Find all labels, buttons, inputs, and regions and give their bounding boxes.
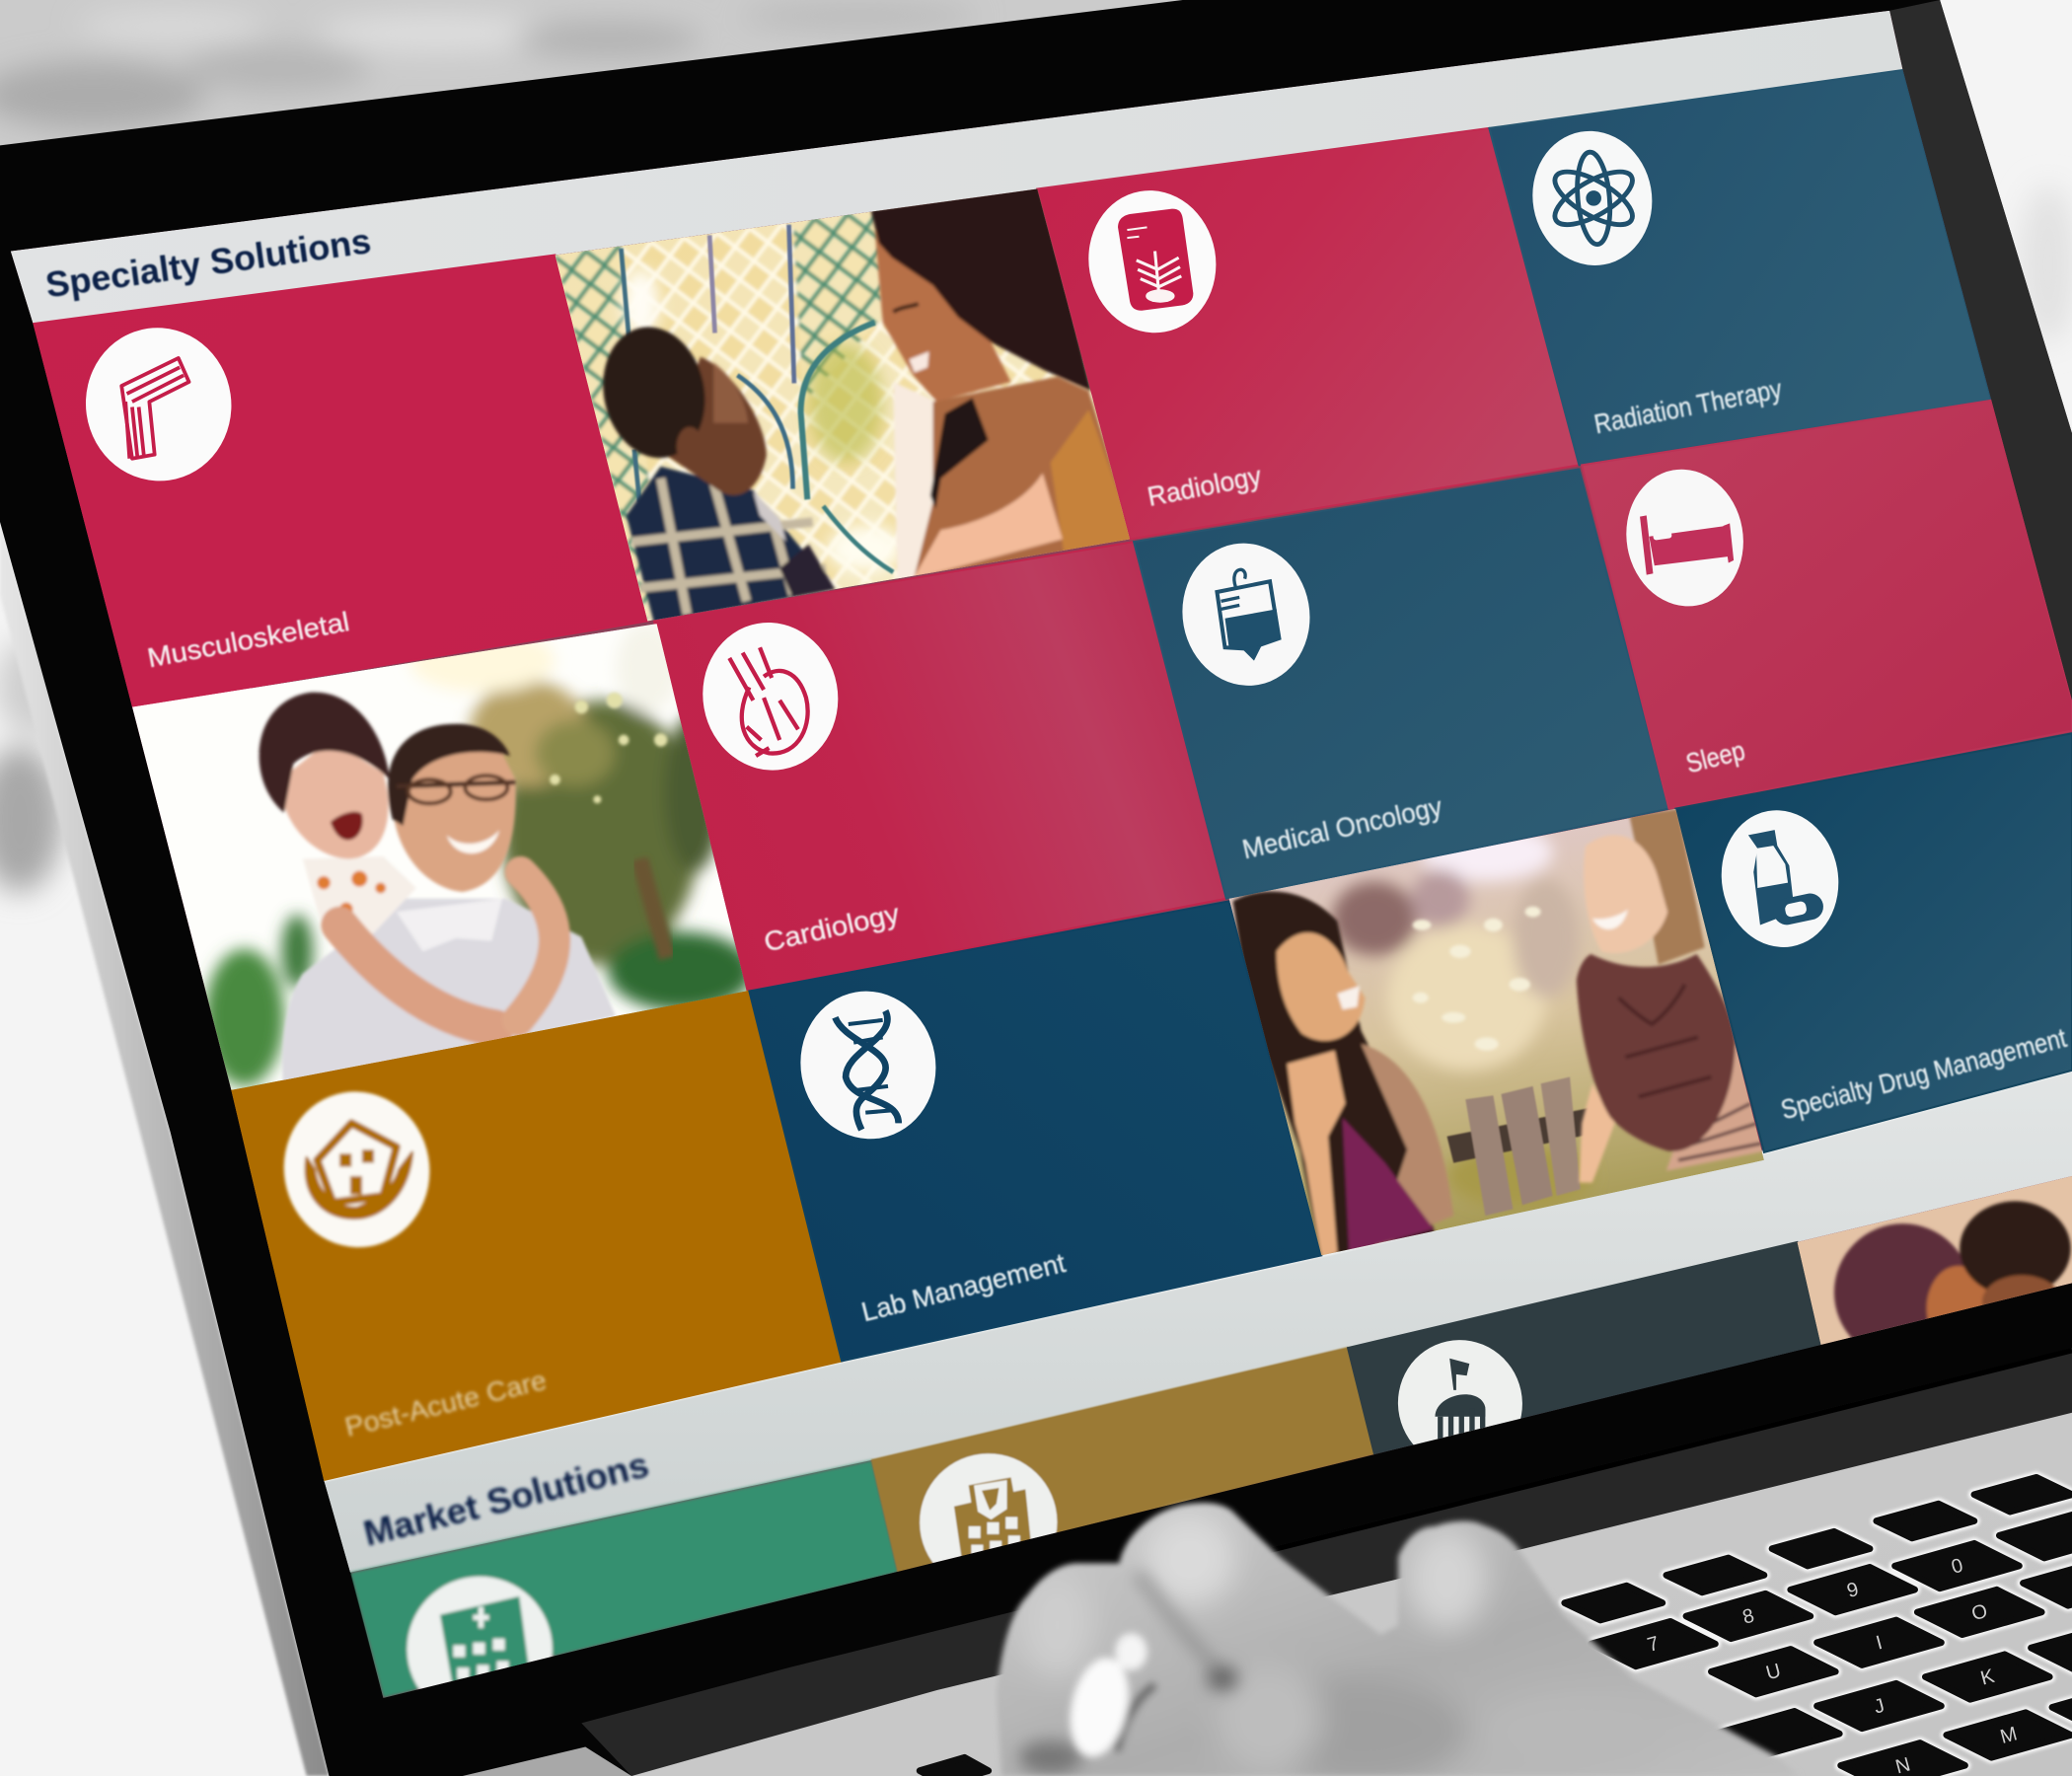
top header band — [11, 11, 1903, 324]
tile: Musculoskeletal: Musculoskeletal — [145, 606, 352, 673]
tile: mother and child photo — [555, 185, 1137, 624]
child shirt — [627, 467, 835, 624]
keyboard keys: J — [1872, 1695, 1887, 1719]
right woman stripes — [1666, 1044, 1765, 1171]
girl head — [280, 740, 389, 859]
keyboard keys: I — [1874, 1632, 1885, 1655]
braid — [930, 398, 989, 509]
keyboard keys: 9 — [1845, 1579, 1861, 1602]
right woman arm — [1579, 1083, 1615, 1183]
right woman scarf — [1577, 954, 1736, 1151]
heading: Market Solutions: Market Solutions — [359, 1443, 652, 1554]
man head — [393, 740, 516, 892]
keyboard keys: K — [1978, 1665, 1997, 1690]
left woman top — [1343, 1118, 1434, 1253]
tile: father and daughter photo — [132, 623, 753, 1103]
keyboard keys: 0 — [1949, 1555, 1965, 1579]
woman top — [913, 473, 1063, 579]
right woman hair — [1629, 809, 1705, 965]
woman arm sleeve — [893, 382, 937, 581]
tile: Specialty Drug Management — [1675, 733, 2072, 1152]
tile: Cardiology — [654, 542, 1226, 991]
tile: Medical Oncology: Medical Oncology — [1239, 790, 1444, 864]
girl shirt — [303, 856, 416, 958]
tile: market gold — [872, 1348, 1374, 1603]
left woman hair — [1233, 891, 1435, 1255]
hinge — [581, 1348, 2072, 1776]
tile: Sleep — [1582, 401, 2072, 809]
icon: x-ray film — [1118, 209, 1193, 311]
woman hair — [871, 185, 1091, 391]
tile: Radiology: Radiology — [1145, 460, 1264, 512]
icon: DNA helix — [835, 1011, 899, 1130]
icon: hospital with shield — [954, 1477, 1033, 1579]
icon: capitol dome — [1435, 1359, 1485, 1453]
lower band — [324, 1071, 2072, 1573]
tile: market dark — [1348, 1242, 1821, 1478]
icon: bottle and pill — [1748, 830, 1825, 927]
tile: Post-Acute Care — [231, 991, 842, 1480]
left woman cardigan — [1361, 1044, 1453, 1249]
ring — [1062, 1633, 1155, 1762]
keyboard keys: 7 — [1645, 1633, 1662, 1657]
keyboard keys: 8 — [1740, 1605, 1756, 1629]
keyboard keys — [920, 1477, 2072, 1776]
bench fence — [1447, 1077, 1592, 1216]
tile: Medical Oncology — [1134, 469, 1669, 899]
tile: Radiation Therapy: Radiation Therapy — [1591, 373, 1784, 439]
icon: atom — [1547, 151, 1640, 246]
tile: two women photo — [1229, 809, 1765, 1258]
keyboard keys: U — [1764, 1660, 1783, 1684]
icon: heart — [729, 647, 808, 756]
woman shoulders — [913, 377, 1137, 581]
tile: market photo — [1797, 1176, 2072, 1361]
arms — [339, 925, 495, 1028]
tile: Radiology — [1037, 128, 1579, 539]
keyboard keys: M — [1998, 1723, 2020, 1748]
hand on keyboard — [985, 1493, 1817, 1776]
tile: Lab Management — [749, 901, 1321, 1361]
man shirt — [231, 899, 616, 1103]
tile: Lab Management: Lab Management — [858, 1247, 1069, 1327]
tile: Post-Acute Care: Post-Acute Care — [341, 1365, 550, 1443]
icon: joint bones — [121, 358, 189, 459]
left woman face — [1277, 932, 1365, 1041]
right woman face — [1584, 835, 1667, 953]
icon: house in hands — [306, 1123, 412, 1219]
icon: IV bag — [1217, 569, 1279, 661]
keyboard deck — [463, 1413, 2072, 1776]
tile: Sleep: Sleep — [1683, 735, 1748, 778]
icon: hospital — [440, 1596, 531, 1705]
tile: Cardiology: Cardiology — [761, 898, 902, 957]
icon: bed — [1640, 515, 1734, 575]
tile: market green — [350, 1460, 899, 1736]
tile: Radiation Therapy — [1489, 70, 1991, 465]
woman face — [875, 230, 1011, 402]
left woman hand and arm — [1287, 1051, 1345, 1258]
tile: Musculoskeletal — [33, 255, 647, 707]
heading: Specialty Solutions: Specialty Solutions — [43, 220, 373, 305]
child head — [667, 357, 767, 495]
keyboard keys: O — [1969, 1600, 1990, 1625]
